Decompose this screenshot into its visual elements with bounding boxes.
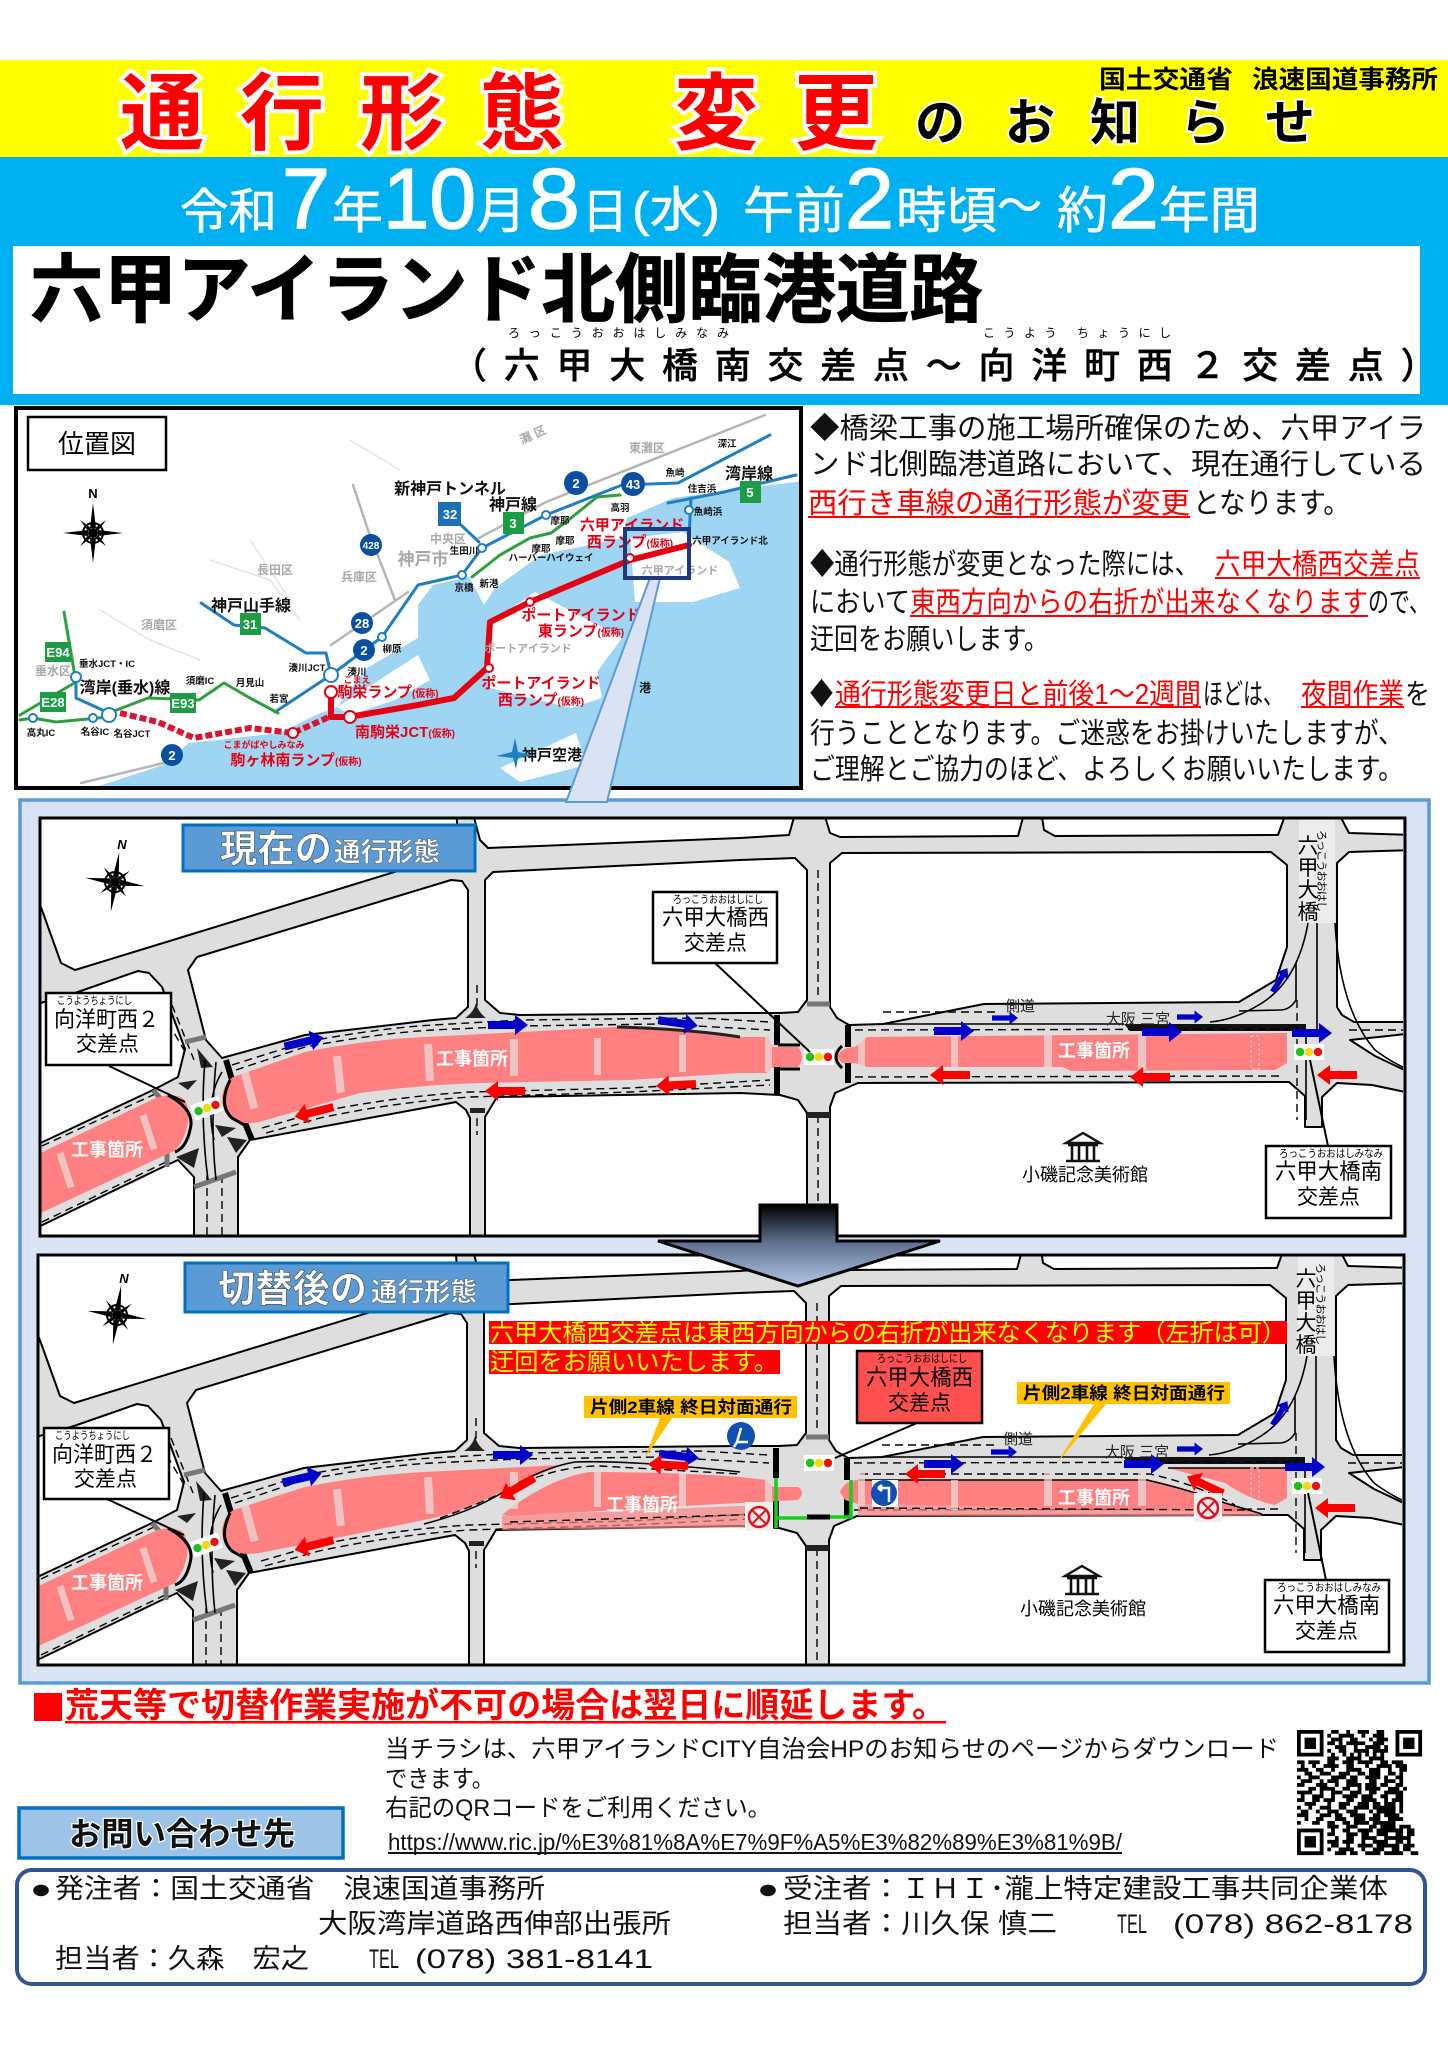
icon: north compass: N xyxy=(88,486,98,501)
work zone labels: 工事箇所 xyxy=(1058,1040,1130,1061)
map black place labels: 摩耶 xyxy=(555,535,575,547)
map route shields: E93 xyxy=(171,696,195,711)
postponement notice: 荒天等で切替作業実施が不可の場合は翌日に順延します。 xyxy=(65,1686,946,1725)
map red ramp labels: 駒ヶ林南ランプ(仮称) xyxy=(230,751,362,769)
label: Koyocho-nishi 2: 向洋町西２ xyxy=(54,1007,159,1032)
client details: (078) 381-8141 xyxy=(415,1944,653,1974)
road name panel xyxy=(13,246,1448,394)
map red ramp labels: 西ランプ(仮称) xyxy=(498,692,584,709)
map black place labels: 神戸線 xyxy=(489,495,537,514)
date and duration: 約 xyxy=(1057,183,1108,239)
label: Rokko-ohashi-minami: ろっこうおおはしみなみ xyxy=(1277,1581,1381,1594)
callout: west lane note xyxy=(584,1396,797,1458)
work zones xyxy=(30,1027,1287,1218)
explanatory text block: 西行き車線の通行形態が変更 xyxy=(808,487,1190,520)
title suffix: 知 xyxy=(1090,95,1140,151)
map red ramp labels: 西ランプ(仮称) xyxy=(587,534,673,551)
Rokko bridge vertical label: 甲 xyxy=(1298,857,1318,880)
contractor details: TEL xyxy=(1117,1909,1147,1939)
date and duration xyxy=(180,152,1260,247)
Rokko bridge vertical label xyxy=(1296,1256,1334,1357)
map route shields: 43 xyxy=(626,477,640,492)
map grey district labels xyxy=(35,422,718,678)
client details: ● xyxy=(30,1874,52,1904)
map red ramp labels: 南駒栄JCT(仮称) xyxy=(355,724,455,741)
Rokko bridge vertical label: ろっこうおおはし xyxy=(1314,1263,1327,1345)
map route shields: 31 xyxy=(243,617,257,632)
explanatory text block: 六甲大橋西交差点 xyxy=(1215,548,1420,581)
map grey district labels: 兵庫区 xyxy=(341,569,377,584)
main title: 態 xyxy=(480,67,564,161)
map black place labels: ハーバーハイウェイ xyxy=(508,553,594,564)
side road labels: 側道 xyxy=(1003,1431,1033,1448)
map grey district labels: 須磨区 xyxy=(141,617,177,632)
map black place labels: 垂水JCT・IC xyxy=(79,658,135,670)
icon: compass: N xyxy=(117,837,127,852)
issuer: 国土交通省 xyxy=(1099,66,1233,94)
map title xyxy=(28,417,166,470)
date and duration: 年間 xyxy=(1159,183,1260,239)
icon: compass xyxy=(81,837,149,916)
label: Rokko-ohashi-minami: 交差点 xyxy=(1297,1186,1360,1209)
heading: current layout xyxy=(183,825,475,871)
blue arrows xyxy=(280,1397,1325,1492)
map black place labels: 湾岸(垂水)線 xyxy=(80,678,170,697)
client details: 発注者：国土交通省 浪速国道事務所 xyxy=(55,1874,545,1904)
label: Koyocho-nishi 2: こうようちょうにし xyxy=(57,994,132,1007)
explanatory text block xyxy=(808,412,1430,786)
callout: west lane note: 片側2車線 終日対面通行 xyxy=(590,1398,792,1417)
contact heading button xyxy=(19,1808,343,1858)
blue eastbound arrows xyxy=(282,964,1332,1056)
icon: blue direction signs xyxy=(727,1422,898,1507)
top yellow banner xyxy=(0,60,1448,161)
label: Rokko-ohashi-minami: ろっこうおおはしみなみ xyxy=(1279,1147,1383,1160)
download note: 右記のQRコードをご利用ください。 xyxy=(385,1795,771,1822)
label: Rokko-ohashi-minami: 六甲大橋南 xyxy=(1273,1593,1380,1618)
issuer xyxy=(1099,66,1438,94)
main title: 形 xyxy=(360,67,444,161)
map black place labels: 湊川 xyxy=(347,666,367,678)
signals xyxy=(190,1044,1324,1121)
label: Rokko-ohashi-nishi: 六甲大橋西 xyxy=(662,905,769,930)
title suffix xyxy=(915,95,1315,151)
work zone labels: 工事箇所 xyxy=(436,1048,508,1069)
panel frame 2 xyxy=(38,1255,1404,1665)
map sea and islands xyxy=(87,480,810,790)
main title: 行 xyxy=(240,67,324,161)
date and duration: 年 xyxy=(332,183,383,239)
heading: current layout: 通行形態 xyxy=(334,837,440,867)
label: museum: 小磯記念美術館 xyxy=(1022,1165,1148,1185)
map black place labels: 柳原 xyxy=(382,643,402,655)
work zone labels: 工事箇所 xyxy=(1058,1487,1130,1508)
download note: 当チラシは、六甲アイランドCITY自治会HPのお知らせのページからダウンロード xyxy=(385,1736,1279,1763)
panel: diagrams outer frame xyxy=(20,800,1429,1683)
contact heading button: お問い合わせ先 xyxy=(69,1816,295,1852)
work zones after switch xyxy=(30,1462,1287,1650)
map black place labels: 港 xyxy=(639,680,651,695)
QR code xyxy=(1297,1730,1422,1855)
main title: 通 xyxy=(120,67,204,161)
map black place labels: 湊川JCT xyxy=(289,662,326,674)
main title xyxy=(120,67,878,161)
download note: https://www.ric.jp/%E3%81%8A%E7%9F%A5%E3%82%89%E3%81%9B/ xyxy=(388,1829,1123,1855)
map black place labels: 京橋 xyxy=(454,582,474,594)
label: Rokko-ohashi-minami xyxy=(1266,1146,1391,1218)
map route shields: E94 xyxy=(46,645,70,660)
date and duration: 日 xyxy=(582,186,628,239)
road base xyxy=(29,1243,1414,1678)
explanatory text block: において xyxy=(810,587,910,619)
map grey district labels: 六甲アイランド xyxy=(642,563,718,577)
panel frame 1 xyxy=(40,818,1405,1236)
map black place labels: 月見山 xyxy=(236,678,264,689)
date and duration: ～ xyxy=(997,180,1042,232)
label: Rokko-ohashi-nishi red: 六甲大橋西 xyxy=(866,1365,973,1390)
side road labels xyxy=(1003,1431,1169,1461)
map black place labels: 若宮 xyxy=(269,693,289,705)
map red ramp labels: こまがばやしみなみ xyxy=(223,739,305,750)
map red ramp labels: 駒栄ランプ(仮称) xyxy=(337,684,439,701)
callout: detour warning xyxy=(489,1320,1287,1376)
date and duration: 2 xyxy=(845,152,894,247)
explanatory text block: ほどは、 xyxy=(1203,679,1283,711)
panel: location map xyxy=(16,408,810,790)
date and duration: 午前 xyxy=(743,183,845,239)
map black place labels: 神戸山手線 xyxy=(211,596,291,615)
map black place labels: 名谷IC xyxy=(81,726,109,738)
client details xyxy=(30,1874,671,1974)
date and duration: (水) xyxy=(632,184,720,237)
map red ramp labels: こまえ xyxy=(343,675,371,685)
map black place labels: 高丸IC xyxy=(27,727,55,739)
map grey district labels: 垂水区 xyxy=(35,663,71,678)
section range: （六甲大橋南交差点～向洋町西２交差点） xyxy=(451,345,1448,386)
map route shields: 3 xyxy=(509,516,517,531)
Rokko bridge vertical label: 橋 xyxy=(1298,901,1318,924)
date and duration: 7 xyxy=(282,152,330,247)
contact details box xyxy=(17,1870,1425,1984)
work zone labels: 工事箇所 xyxy=(71,1572,143,1593)
leader lines xyxy=(109,963,1328,1146)
map black place labels: 新神戸トンネル xyxy=(394,480,506,498)
map black place labels: 新港 xyxy=(479,578,499,590)
red westbound arrows xyxy=(292,1065,1357,1127)
explanatory text block: 迂回をお願いします。 xyxy=(810,624,1048,656)
map black place labels: 名谷JCT xyxy=(114,728,151,740)
main title: 更 xyxy=(794,67,878,161)
explanatory text block: 夜間作業 xyxy=(1301,678,1404,711)
map black place labels: 神戸空港 xyxy=(522,746,582,764)
date and duration: 令和 xyxy=(180,186,277,239)
explanatory text block: 東西方向からの右折が出来なくなります xyxy=(910,586,1368,619)
contractor details: 受注者：ＩＨＩ･瀧上特定建設工事共同企業体 xyxy=(783,1874,1388,1904)
explanatory text block: 通行形態変更日と前後1～2週間 xyxy=(835,678,1201,711)
explanatory text block: ◆ xyxy=(810,678,833,711)
label: Koyocho-nishi 2: 交差点 xyxy=(74,1468,137,1491)
work zone labels: 工事箇所 xyxy=(71,1139,143,1160)
map route shields: E28 xyxy=(41,695,65,710)
pavement joints xyxy=(57,1468,1259,1621)
map route shields xyxy=(40,471,761,766)
panel: layout after switch xyxy=(29,1243,1414,1678)
label: Rokko-ohashi-minami: 交差点 xyxy=(1295,1620,1358,1643)
callout: detour warning: 迂回をお願いいたします。 xyxy=(490,1349,778,1376)
map black place labels: 摩耶 xyxy=(550,515,570,527)
title suffix: せ xyxy=(1265,95,1315,151)
map black place labels: 魚崎浜 xyxy=(694,506,723,518)
map route shields: 2 xyxy=(572,476,580,491)
map black place labels: 住吉浜 xyxy=(688,483,717,495)
map grey district labels: 長田区 xyxy=(257,563,293,577)
road name panel: こうよう ちょうにし xyxy=(983,326,1171,340)
map black place labels xyxy=(27,438,773,764)
label: Rokko-ohashi-nishi: ろっこうおおはしにし xyxy=(673,893,763,906)
label: Koyocho-nishi 2: こうようちょうにし xyxy=(55,1429,130,1442)
road name: 六甲アイランド北側臨港道路 xyxy=(30,248,983,332)
map black place labels: 高羽 xyxy=(610,502,630,514)
explanatory text block: ◆橋梁工事の施工場所確保のため、六甲アイラ xyxy=(810,412,1426,445)
title suffix: ら xyxy=(1180,95,1230,151)
pavement joints xyxy=(57,1035,1259,1188)
map route shields: 28 xyxy=(355,616,369,631)
date and duration: 8 xyxy=(528,152,580,247)
work zone labels xyxy=(71,1040,1130,1160)
map red ramp labels xyxy=(223,516,684,769)
road base xyxy=(30,810,1415,1245)
furigana: ろっこうおおはしみなみ xyxy=(508,326,729,340)
label: Koyocho-nishi 2: 交差点 xyxy=(76,1033,139,1056)
download note: できます。 xyxy=(385,1766,494,1793)
Rokko bridge vertical label: 甲 xyxy=(1296,1290,1316,1313)
label: Rokko-ohashi-minami: 六甲大橋南 xyxy=(1275,1159,1382,1184)
label: Rokko-ohashi-nishi red xyxy=(857,1351,982,1423)
map grey district labels: 灘 区 xyxy=(517,422,548,447)
callout: east lane note xyxy=(1017,1382,1230,1463)
explanatory text block: ◆通行形態が変更となった際には、 xyxy=(810,548,1199,581)
map red ramp labels: 東ランプ(仮称) xyxy=(538,623,624,640)
side road labels: 大阪 三宮 xyxy=(1106,1011,1170,1028)
heading: after switch xyxy=(185,1263,508,1312)
icon: no entry signs xyxy=(745,1493,1222,1531)
date and duration: 月 xyxy=(476,183,526,239)
map grey district labels: 東灘区 xyxy=(629,440,665,455)
label: Rokko-ohashi-nishi red: 交差点 xyxy=(888,1392,951,1415)
date and duration: 時頃 xyxy=(896,183,997,239)
title suffix: の xyxy=(915,95,965,151)
leader lines xyxy=(107,1423,1326,1580)
signals xyxy=(189,1455,1322,1558)
map grey district labels: ポートアイランド xyxy=(484,642,572,655)
icon: compass: N xyxy=(119,1271,129,1286)
client details: 担当者：久森 宏之 xyxy=(55,1944,309,1974)
label: Koyocho-nishi 2 xyxy=(46,993,171,1065)
map junction markers xyxy=(29,506,693,738)
Rokko bridge vertical label: 大 xyxy=(1296,1312,1316,1335)
label: Rokko-ohashi-nishi xyxy=(653,892,777,963)
label: Koyocho-nishi 2: 向洋町西２ xyxy=(52,1442,157,1467)
map title: 位置図 xyxy=(58,429,136,459)
title suffix: お xyxy=(1005,95,1055,151)
map grey district labels: 神戸市 xyxy=(398,549,448,569)
work zone labels xyxy=(71,1487,1130,1593)
map zoom callout wedge xyxy=(566,529,689,802)
label: Rokko-ohashi-nishi red: ろっこうおおはしにし xyxy=(877,1352,967,1365)
icon: compass xyxy=(83,1271,151,1349)
map route shields: 2 xyxy=(168,748,176,763)
green barrier lines xyxy=(776,1478,851,1528)
contractor details: ● xyxy=(757,1874,779,1904)
red arrows xyxy=(292,1454,1355,1560)
map black place labels: 湾岸線 xyxy=(725,464,773,483)
side road labels: 側道 xyxy=(1005,998,1035,1015)
label: Rokko-ohashi-nishi: 交差点 xyxy=(684,932,747,955)
Rokko bridge vertical label: ろっこうおおはし xyxy=(1315,830,1328,912)
map roads xyxy=(20,415,796,783)
Rokko bridge vertical label xyxy=(1298,818,1335,924)
client details: TEL xyxy=(369,1944,399,1974)
map black place labels: 摩耶 xyxy=(531,543,551,555)
main title: 変 xyxy=(674,67,758,161)
blue date band xyxy=(0,152,1448,405)
date and duration: 2 xyxy=(1108,152,1159,247)
explanatory text block: となります。 xyxy=(1193,488,1350,520)
icon: museum xyxy=(1066,1133,1100,1161)
explanatory text block: を xyxy=(1405,679,1430,711)
Rokko bridge vertical label: 大 xyxy=(1298,879,1318,902)
issuer: 浪速国道事務所 xyxy=(1252,66,1438,94)
panel: current traffic layout xyxy=(30,810,1415,1245)
Rokko bridge vertical label: 橋 xyxy=(1296,1334,1316,1357)
map red ramp labels: 六甲アイランド xyxy=(580,516,684,534)
map route shields: 428 xyxy=(363,541,380,552)
map route shields: 2 xyxy=(360,643,368,658)
label: Rokko-ohashi-minami xyxy=(1265,1580,1389,1652)
label: museum: 小磯記念美術館 xyxy=(1020,1599,1146,1619)
big down arrow between panels xyxy=(658,1205,940,1286)
icon: north compass xyxy=(63,486,123,563)
map black place labels: 須磨IC xyxy=(186,675,214,687)
side road labels xyxy=(1005,998,1170,1028)
contractor details: (078) 862-8178 xyxy=(1173,1909,1413,1939)
callout: detour warning: 六甲大橋西交差点は東西方向からの右折が出来なくなります（左折は可） xyxy=(490,1320,1286,1347)
icon: airplane xyxy=(496,738,533,769)
download note xyxy=(385,1736,1279,1855)
map black place labels: 深江 xyxy=(717,438,737,450)
contractor details xyxy=(757,1874,1413,1939)
date and duration: 10 xyxy=(383,152,476,247)
map red ramp labels: ポートアイランド xyxy=(481,675,601,692)
map grey district labels: 中央区 xyxy=(430,531,466,546)
contractor details: 担当者：川久保 慎二 xyxy=(783,1909,1057,1939)
work zone labels: 工事箇所 xyxy=(606,1494,678,1515)
map black place labels: 魚崎 xyxy=(665,467,685,479)
callout: east lane note: 片側2車線 終日対面通行 xyxy=(1023,1384,1225,1403)
map black place labels: 生田川 xyxy=(450,545,478,557)
map route shields: 32 xyxy=(443,507,457,522)
Rokko bridge vertical label: 六 xyxy=(1298,835,1318,858)
label: Koyocho-nishi 2 xyxy=(44,1428,169,1499)
map red ramp labels: ポートアイランド xyxy=(521,607,641,624)
explanatory text block: ンド北側臨港道路において、現在通行している xyxy=(810,448,1426,481)
heading: current layout: 現在の xyxy=(220,829,332,871)
icon: museum xyxy=(1065,1566,1099,1594)
map route shields: 5 xyxy=(746,485,754,500)
client details: 大阪湾岸道路西伸部出張所 xyxy=(318,1909,671,1939)
Rokko bridge vertical label: 六 xyxy=(1296,1268,1316,1291)
side road labels: 大阪 三宮 xyxy=(1105,1444,1169,1461)
heading: after switch: 通行形態 xyxy=(371,1277,477,1307)
map black place labels: 六甲アイランド北 xyxy=(692,535,768,547)
heading: after switch: 切替後の xyxy=(218,1269,367,1311)
